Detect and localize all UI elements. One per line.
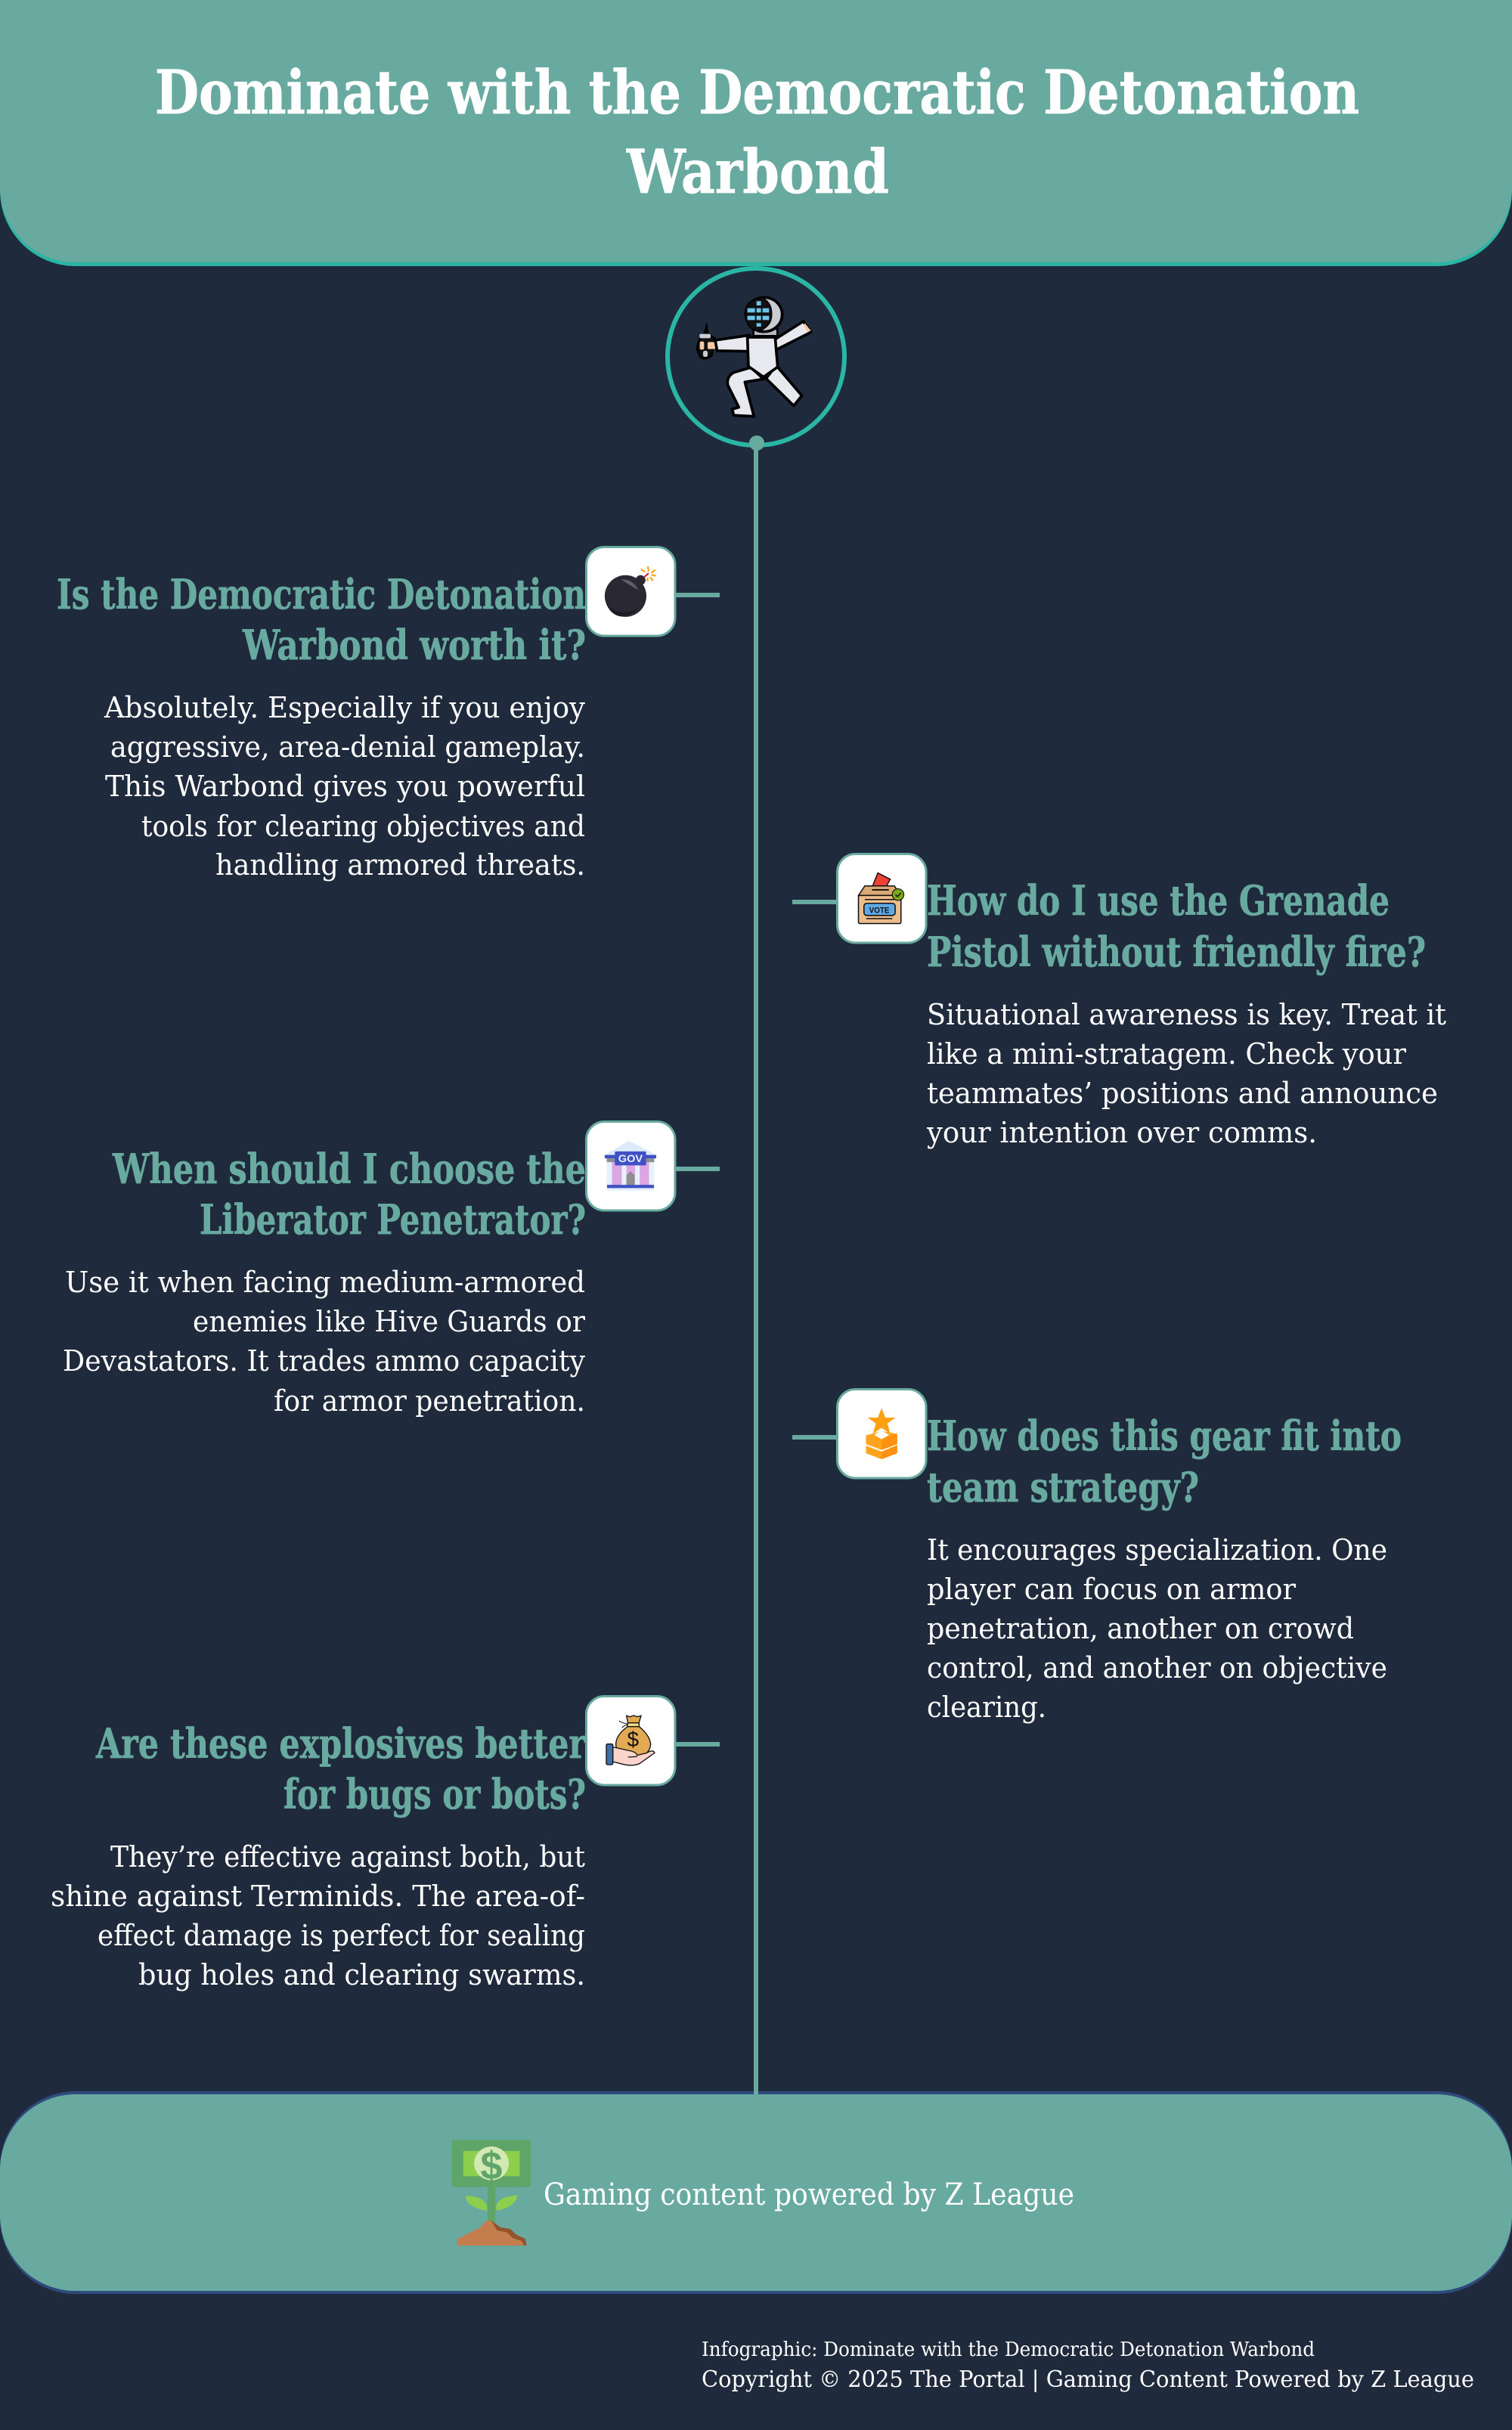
heading: team strategy [927, 1412, 1402, 1511]
timeline line [754, 443, 758, 2095]
text block: worth it: handling armored threats. [215, 848, 585, 882]
heading: worth it: Is the Democratic Detonation [57, 570, 586, 618]
title: Warbond [626, 136, 889, 207]
text block: team strategy: clearing. [927, 1691, 1046, 1724]
text block: liberator penetrator: Use it when facing medium-armored [65, 1266, 585, 1299]
heading: team strategy: team strategy? [927, 1463, 1199, 1511]
text block: grenade pistol: your intention over comms. [926, 1116, 1317, 1149]
text block: liberator penetrator: for armor penetration. [274, 1384, 585, 1418]
heading: grenade pistol [927, 876, 1426, 976]
text block: worth it: tools for clearing objectives and [141, 810, 585, 843]
heading: worth it: Warbond worth it? [242, 621, 586, 669]
icon: fencer in circle [668, 268, 844, 451]
card: rank star icon [838, 1390, 926, 1478]
heading: bugs or bots: for bugs or bots? [284, 1770, 586, 1818]
heading: bugs or bots [95, 1719, 586, 1818]
card: bomb icon [587, 547, 675, 636]
card: ballot box icon [838, 854, 926, 943]
card: government building icon: GOV [618, 1153, 643, 1164]
text block: liberator penetrator: Devastators. It trades ammo capacity [63, 1344, 586, 1378]
connector: worth it [674, 593, 720, 597]
heading: worth it [57, 570, 586, 669]
text block: worth it: This Warbond gives you powerful [105, 770, 585, 803]
connector: team strategy [792, 1435, 838, 1440]
panel: grenade pistol [792, 854, 1446, 1149]
card: money bag icon [587, 1697, 675, 1785]
text block: worth it: Absolutely. Especially if you enjoy [104, 691, 586, 724]
text block: bugs or bots: They’re effective against both, but [110, 1840, 585, 1874]
text block: bugs or bots [51, 1840, 585, 1991]
credits: Infographic: Dominate with the Democratic Detonation Warbond [702, 2339, 1315, 2361]
card: government building icon [587, 1122, 675, 1210]
text block: grenade pistol: teammates’ positions and announce [927, 1077, 1438, 1110]
panel: worth it [57, 547, 720, 882]
card: money bag icon: $ [627, 1728, 640, 1751]
text block: team strategy: control, and another on objective [927, 1651, 1387, 1685]
icon: money plant [452, 2140, 531, 2246]
text block: bugs or bots: effect damage is perfect for sealing [98, 1919, 585, 1952]
heading: bugs or bots: Are these explosives better [95, 1719, 586, 1768]
panel: bugs or bots [51, 1697, 720, 1991]
text block: bugs or bots: shine against Terminids. The area-of- [51, 1880, 585, 1913]
header banner [0, 0, 1512, 266]
credits [702, 2339, 1474, 2393]
title [155, 57, 1359, 207]
icon: money plant: $ [481, 2144, 503, 2188]
heading: liberator penetrator: Liberator Penetrator? [200, 1195, 586, 1244]
footer text: Gaming content powered by Z League [544, 2177, 1074, 2212]
text block: team strategy [927, 1533, 1387, 1724]
text block: worth it: aggressive, area-denial gameplay. [110, 730, 585, 764]
connector: liberator penetrator [674, 1167, 720, 1171]
text block: team strategy: penetration, another on crowd [927, 1612, 1354, 1645]
connector: bugs or bots [674, 1742, 720, 1747]
footer band [0, 2091, 1512, 2294]
text block: liberator penetrator: enemies like Hive Guards or [193, 1305, 586, 1338]
text block: grenade pistol: Situational awareness is key. Treat it [927, 998, 1446, 1031]
card: ballot box icon: VOTE [869, 906, 889, 915]
text block: grenade pistol [926, 998, 1446, 1149]
panel: liberator penetrator [63, 1122, 720, 1418]
text block: team strategy: It encourages specialization. One [927, 1533, 1387, 1567]
text block: worth it [104, 691, 586, 882]
credits: Copyright © 2025 The Portal | Gaming Content Powered by Z League [702, 2366, 1474, 2393]
text block: team strategy: player can focus on armor [927, 1573, 1297, 1606]
heading: grenade pistol: How do I use the Grenade [927, 876, 1390, 925]
text block: liberator penetrator [63, 1266, 586, 1418]
panel: team strategy [792, 1390, 1402, 1724]
text block: grenade pistol: like a mini-stratagem. Check your [927, 1037, 1407, 1071]
heading: liberator penetrator [112, 1145, 586, 1244]
text block: bugs or bots: bug holes and clearing swarms. [138, 1958, 585, 1991]
heading: liberator penetrator: When should I choose the [112, 1145, 586, 1193]
connector: grenade pistol [792, 900, 838, 904]
